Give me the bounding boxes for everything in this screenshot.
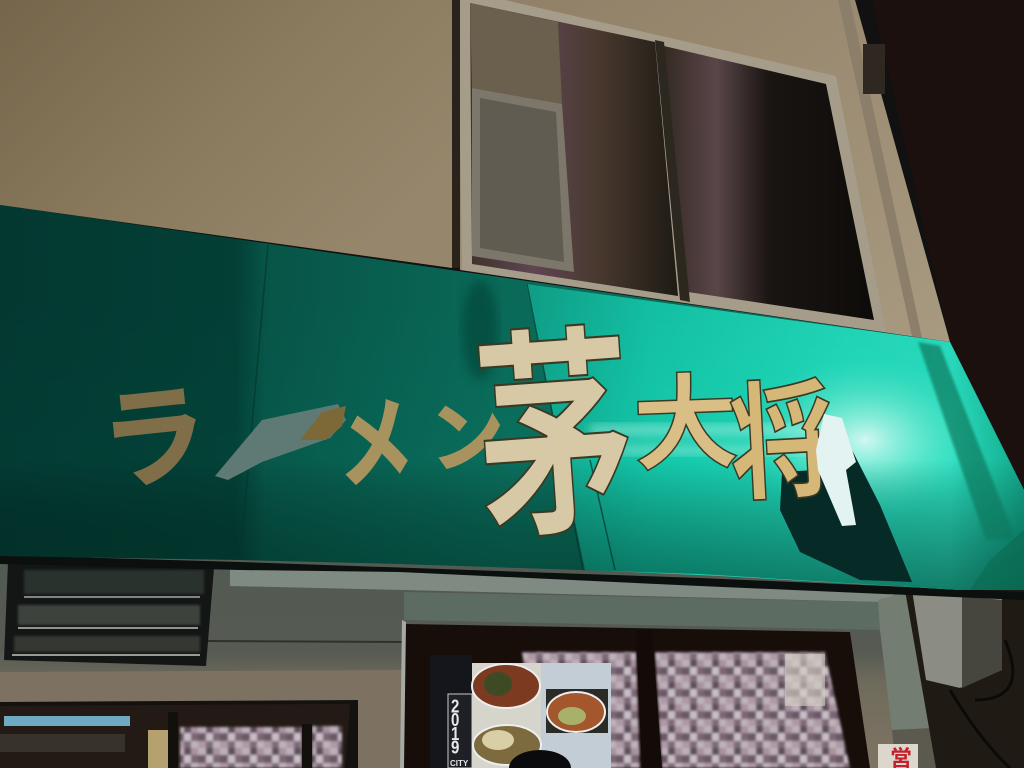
sign bottom shade bbox=[0, 205, 1024, 590]
shop window bbox=[400, 620, 870, 768]
green sign bbox=[0, 205, 1024, 590]
dark left weathering bbox=[462, 280, 498, 380]
upper wall left bbox=[0, 0, 460, 268]
right side dark corner bbox=[905, 590, 1024, 768]
small left window bbox=[0, 700, 358, 768]
lower wall bbox=[0, 555, 1024, 768]
person head bbox=[509, 750, 571, 768]
small red sticker bbox=[878, 744, 918, 768]
air conditioning unit outside bbox=[912, 590, 1002, 688]
window mullion bbox=[636, 630, 662, 768]
long vowel mark bbox=[215, 404, 346, 480]
vent louvre bbox=[4, 562, 214, 666]
vertical banner with year: 0 bbox=[451, 710, 459, 731]
light ripple streaks bbox=[590, 425, 830, 454]
dish photo right bbox=[546, 689, 608, 733]
katakana ン: ン bbox=[427, 392, 507, 482]
right pilaster bbox=[878, 592, 932, 730]
panel seams bbox=[240, 245, 615, 570]
upper window bbox=[452, 0, 886, 332]
dark neighbouring building bbox=[872, 0, 1024, 490]
kanji 茅: 茅 bbox=[468, 309, 643, 567]
air conditioner bbox=[472, 88, 574, 272]
fascia above shop window bbox=[404, 592, 880, 630]
cables bbox=[950, 640, 1013, 768]
katakana メ: メ bbox=[334, 389, 416, 501]
collage panel left bbox=[522, 652, 640, 768]
collage panel right bbox=[655, 652, 850, 768]
dark torn patch bbox=[780, 450, 912, 582]
fascia top band bbox=[230, 566, 905, 602]
weathered right edge stain bbox=[918, 342, 1016, 540]
vertical banner with year: CITY bbox=[450, 759, 469, 768]
kanji 大: 大 bbox=[631, 365, 741, 485]
vertical banner with year: 2 bbox=[451, 696, 459, 717]
under-sign dark shadow band bbox=[0, 555, 1024, 600]
katakana ラ: ラ bbox=[96, 372, 213, 505]
vertical banner with year bbox=[430, 655, 472, 768]
wall joint line bbox=[205, 640, 405, 643]
torn white patch bbox=[816, 414, 856, 526]
vertical banner with year: 1 bbox=[451, 723, 459, 744]
upper wall right bbox=[460, 0, 950, 342]
drain pipe bbox=[838, 0, 922, 338]
window pane top left bbox=[470, 3, 562, 104]
menu poster bbox=[472, 663, 611, 768]
window divider bbox=[655, 40, 690, 302]
vertical banner with year: 9 bbox=[451, 737, 459, 758]
sign lettering bbox=[96, 309, 856, 567]
wall lower tint bbox=[0, 670, 405, 768]
sign light glow bbox=[745, 356, 985, 524]
meter box on pipe bbox=[863, 44, 885, 94]
ramen bowl photo bottom bbox=[473, 725, 541, 765]
bright lit sign section bbox=[526, 284, 1024, 590]
ramen bowl photo top bbox=[472, 664, 540, 708]
kanji 将: 将 bbox=[726, 369, 840, 517]
